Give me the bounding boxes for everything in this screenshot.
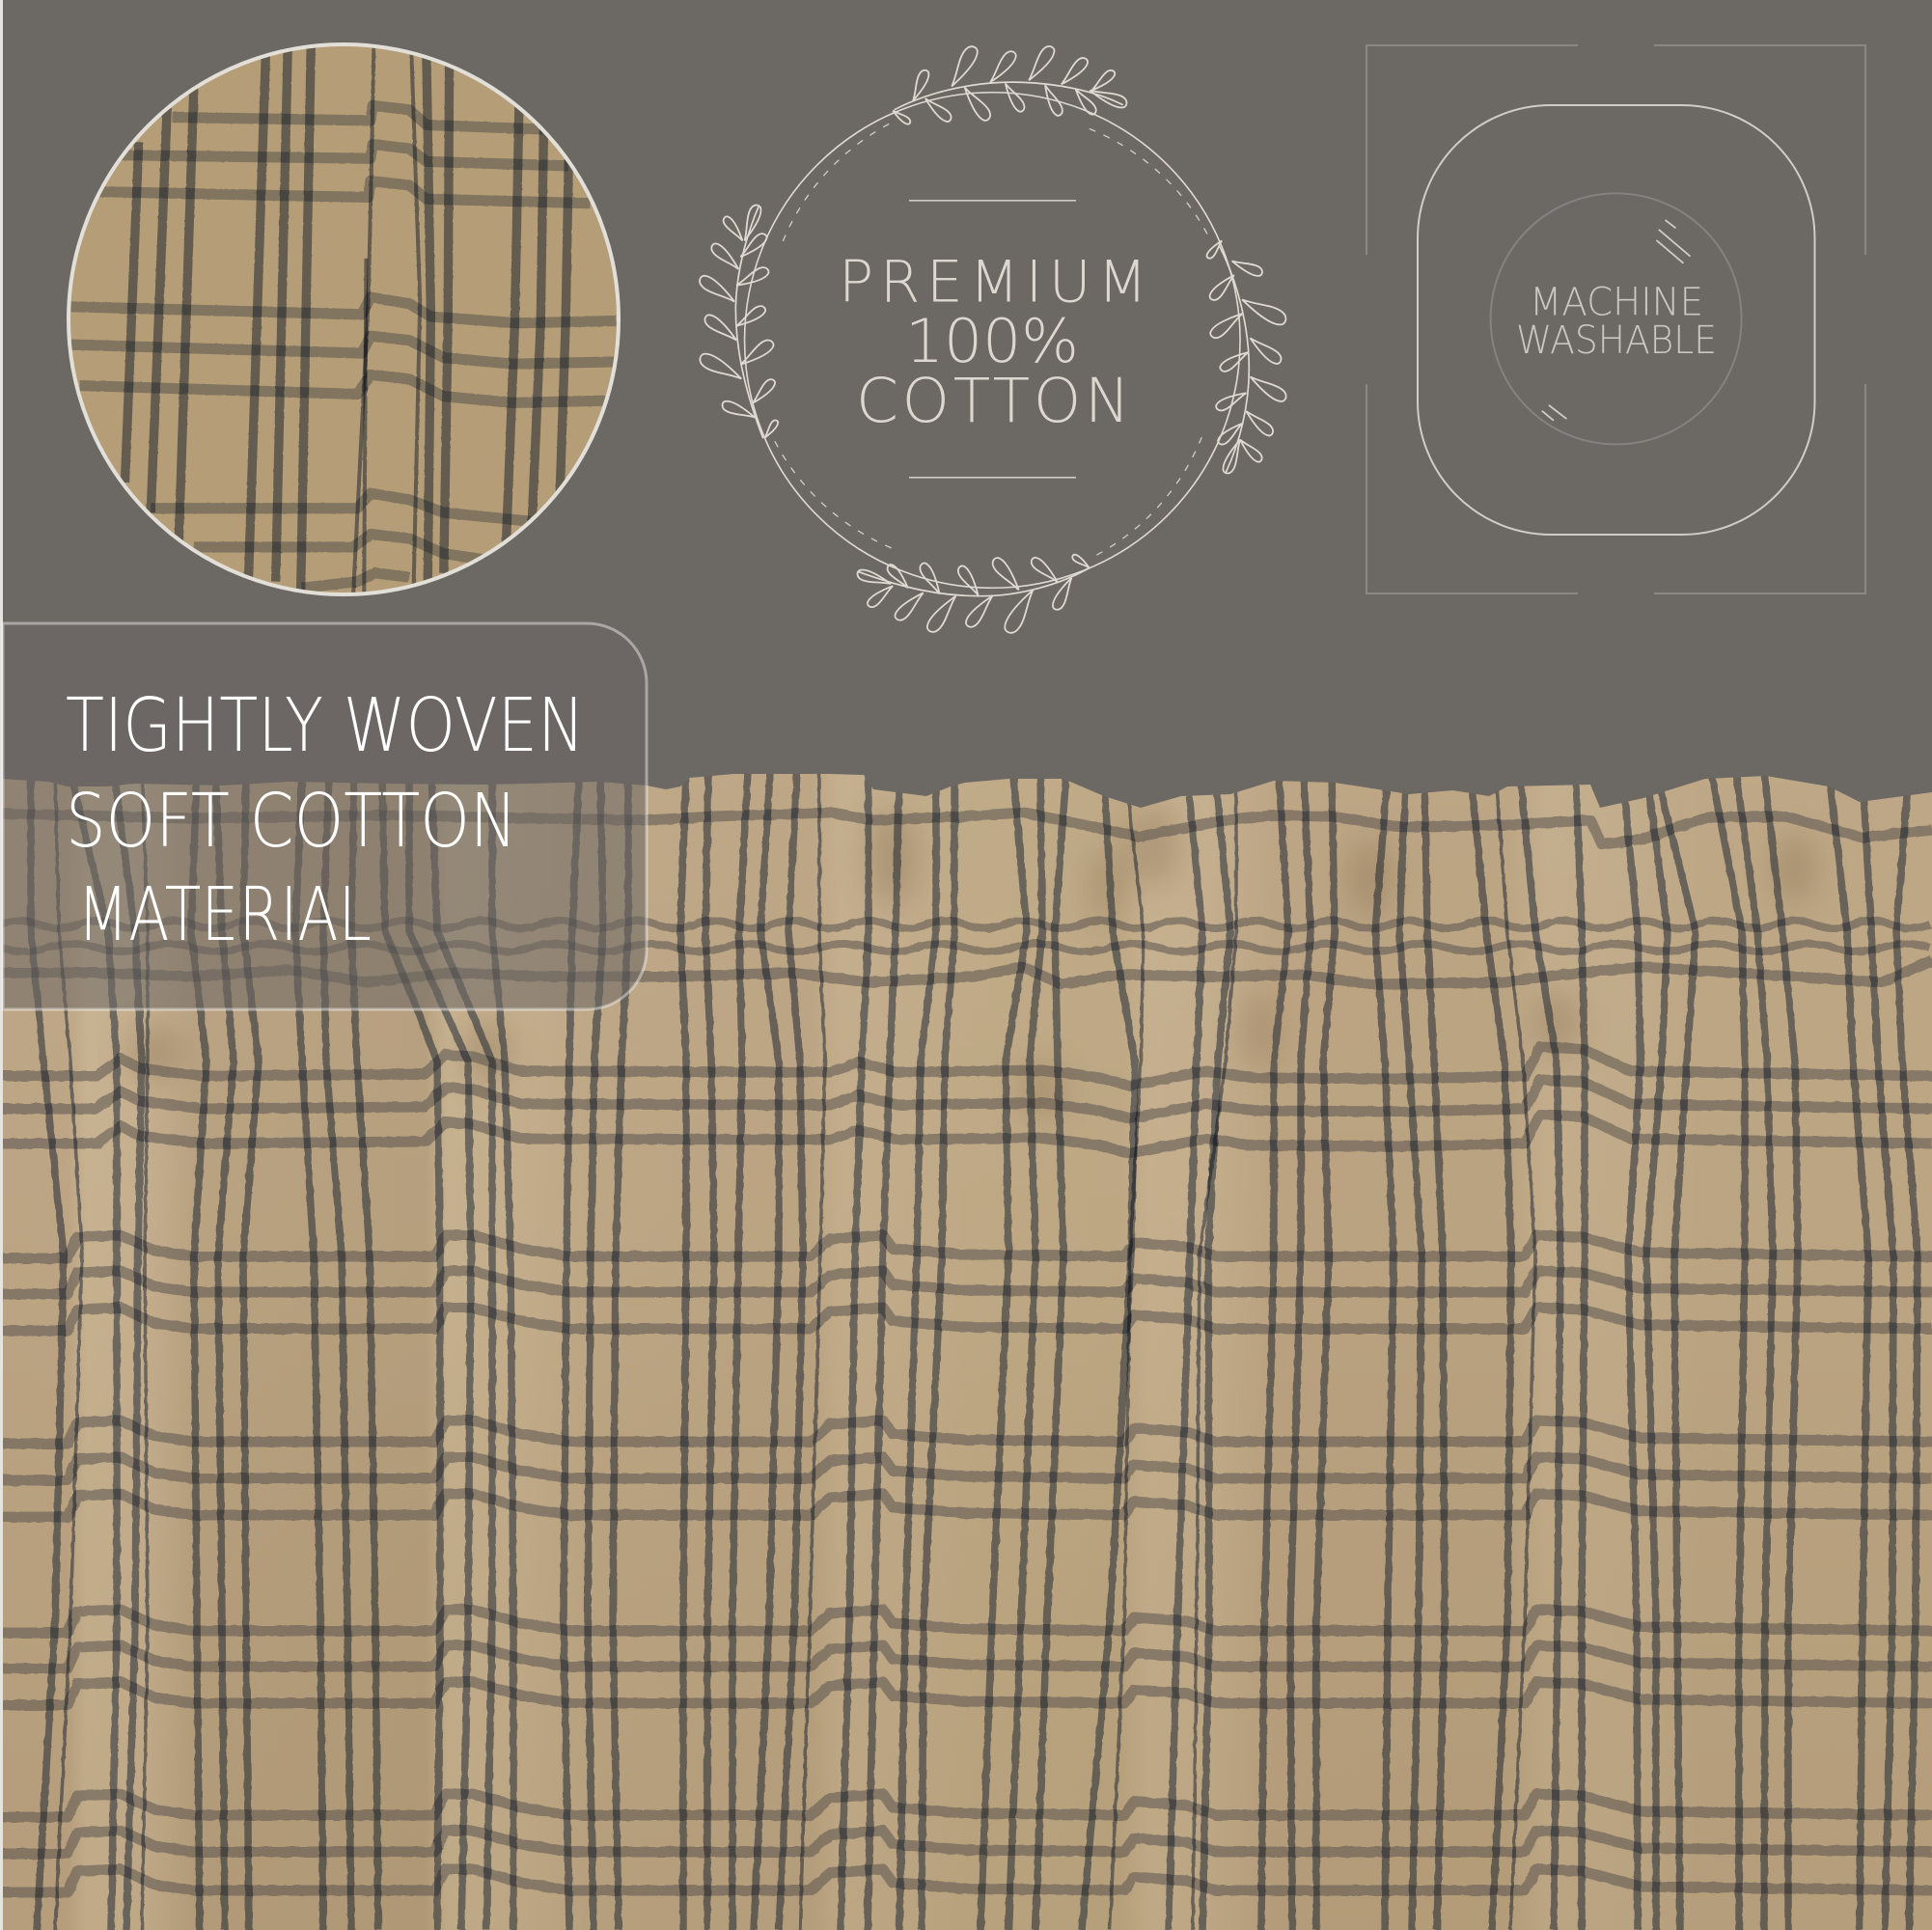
divider above text	[909, 200, 1076, 202]
corner brackets	[1366, 45, 1865, 593]
heading: premium 100% cotton: PREMIUM	[839, 249, 1147, 317]
heading: premium 100% cotton: 100%	[905, 306, 1079, 376]
callout text: MATERIAL	[77, 872, 372, 958]
plaid vertical stripes	[31, 772, 1918, 1930]
fabric detail swatch circle	[52, 30, 638, 612]
callout panel: tightly woven soft cotton material	[3, 623, 647, 1009]
plaid horizontal stripes	[0, 813, 1932, 1892]
divider below text	[909, 477, 1076, 479]
callout text: SOFT COTTON	[66, 779, 517, 865]
callout text	[66, 683, 585, 958]
callout text: TIGHTLY WOVEN	[66, 683, 585, 769]
leaves: bottom branch	[856, 553, 1090, 636]
leaves: top branch	[892, 43, 1129, 125]
heading: premium 100% cotton: COTTON	[856, 366, 1130, 436]
photo: gathered plaid curtain	[0, 753, 1932, 1930]
label: machine washable: MACHINE	[1530, 280, 1703, 324]
label: machine washable: WASHABLE	[1516, 318, 1717, 363]
leaves: right branch	[1205, 239, 1288, 476]
machine washable icon	[1366, 45, 1865, 593]
washer drum circle	[1491, 193, 1742, 444]
label: machine washable	[1516, 280, 1717, 363]
left margin strip	[0, 0, 3, 1930]
wreath ring	[697, 43, 1288, 636]
washer body outline	[1418, 105, 1814, 535]
leaves: left branch	[697, 204, 780, 439]
wreath badge: premium 100% cotton	[697, 43, 1288, 636]
heading: premium 100% cotton	[839, 249, 1147, 436]
drum glints	[1542, 220, 1690, 420]
